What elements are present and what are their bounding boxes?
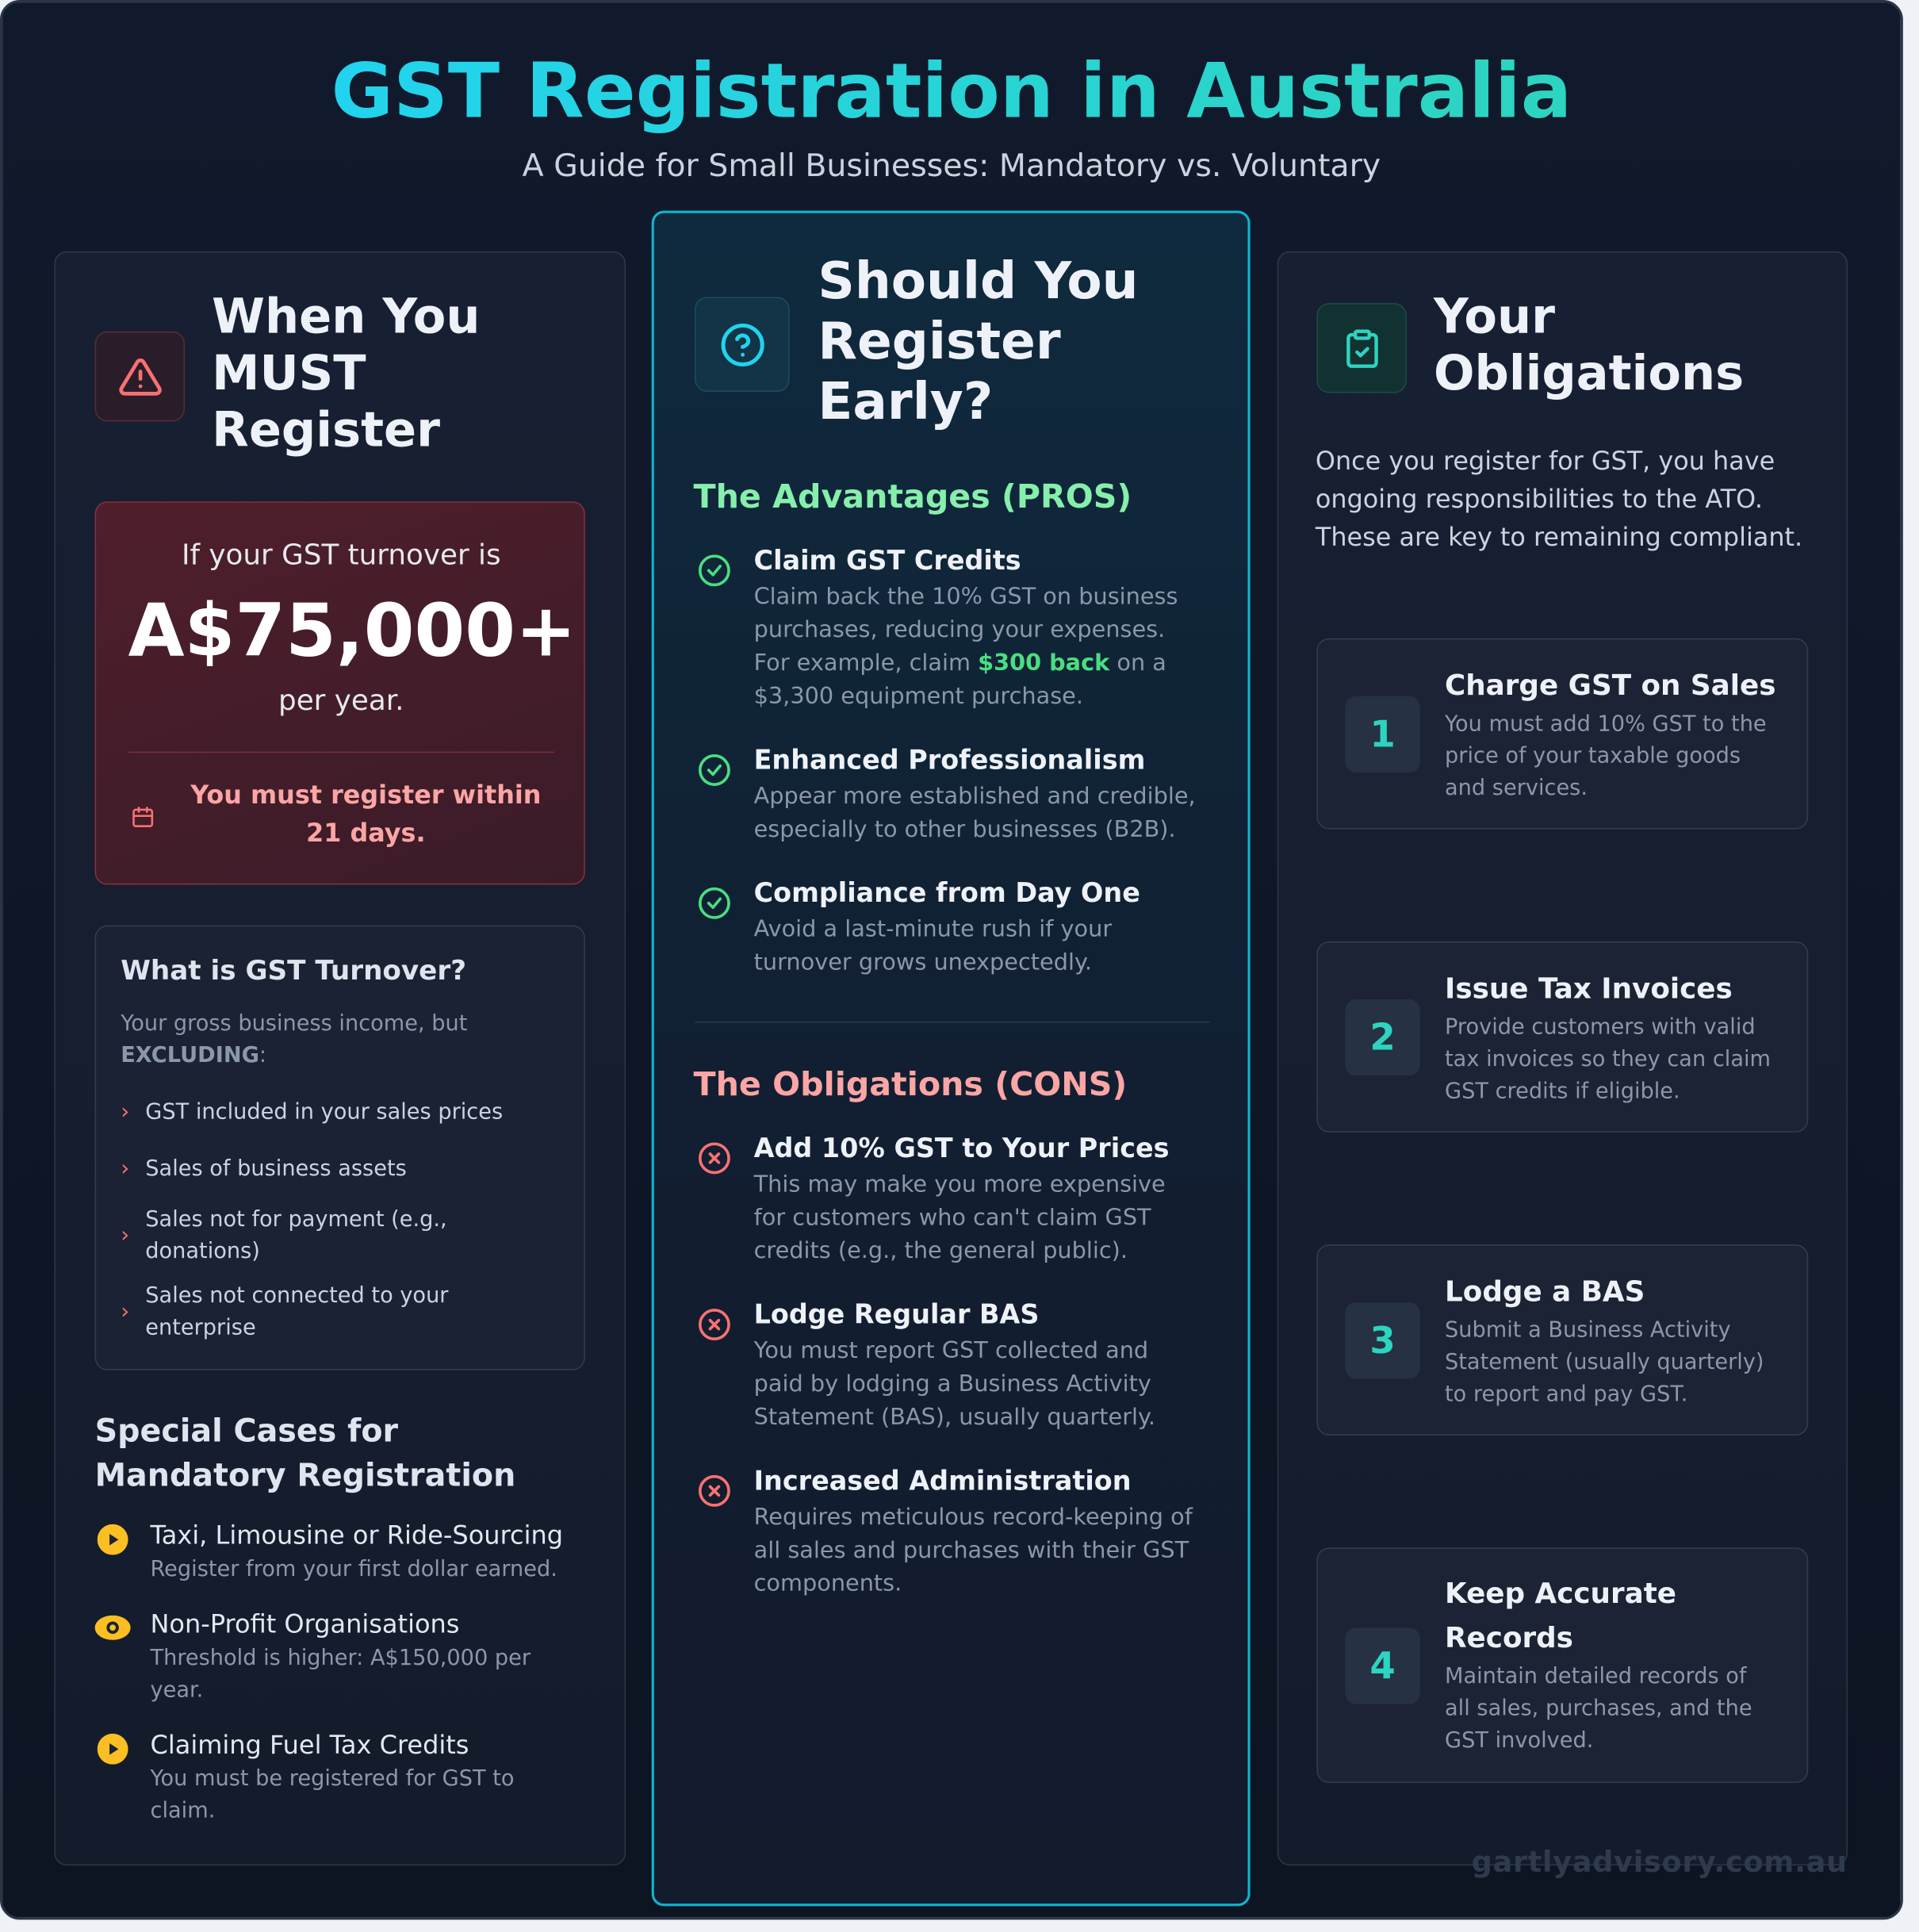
pro 2: Appear more established and credible, especially to other businesses (B2B). xyxy=(754,784,1196,843)
panel: what is gst turnover: › xyxy=(121,1224,129,1248)
card 4: Keep Accurate Records xyxy=(1445,1578,1676,1654)
pro 2 xyxy=(699,746,1196,843)
card 4 xyxy=(1316,1547,1808,1783)
heading xyxy=(212,289,480,458)
panel: what is gst turnover: Your gross business income, but EXCLUDING: xyxy=(121,1012,467,1068)
title: GST Registration in Australia xyxy=(331,47,1572,136)
special cases heading: Mandatory Registration xyxy=(95,1458,515,1495)
special case: taxi: Taxi, Limousine or Ride-Sourcing xyxy=(151,1520,563,1550)
card 1: Charge GST on Sales xyxy=(1445,670,1776,703)
heading xyxy=(1434,289,1744,401)
threshold callout xyxy=(95,501,585,884)
con 1: Add 10% GST to Your Prices xyxy=(754,1133,1170,1164)
panel: your obligations xyxy=(1277,251,1848,1865)
card 3: Lodge a BAS xyxy=(1445,1277,1645,1309)
pro 3 xyxy=(699,879,1140,976)
heading xyxy=(818,250,1139,431)
panel: what is gst turnover: Sales of business assets xyxy=(145,1157,407,1182)
panel: what is gst turnover: › xyxy=(121,1100,129,1125)
pros heading: The Advantages (PROS) xyxy=(694,478,1132,516)
icon: question xyxy=(695,297,790,392)
intro text: Once you register for GST, you have ongoing responsibilities to the ATO. These are key to remaining compliant. xyxy=(1316,446,1802,552)
special case: fuel tax: You must be registered for GST to claim. xyxy=(151,1767,515,1823)
panel: what is gst turnover: Sales not for payment (e.g., donations) xyxy=(145,1208,447,1264)
card 2 xyxy=(1316,941,1808,1133)
card 1: You must add 10% GST to the price of your taxable goods and services. xyxy=(1445,712,1767,801)
special cases heading xyxy=(95,1413,515,1495)
con 2: You must report GST collected and paid by lodging a Business Activity Statement (BAS), usually quarterly. xyxy=(754,1338,1155,1431)
icon: calendar xyxy=(132,807,154,827)
con 3 xyxy=(699,1466,1193,1597)
con 2 xyxy=(699,1300,1155,1431)
con 2: Lodge Regular BAS xyxy=(754,1300,1039,1331)
con 3: Requires meticulous record-keeping of all sales and purchases with their GST components. xyxy=(754,1505,1193,1597)
special case: non-profit xyxy=(95,1609,531,1703)
special case: fuel tax: Claiming Fuel Tax Credits xyxy=(151,1730,469,1760)
heading: MUST xyxy=(212,347,366,401)
panel: when you must register xyxy=(54,251,626,1865)
special case: fuel tax xyxy=(97,1730,515,1823)
panel: should you register early xyxy=(652,211,1251,1906)
pro 1 xyxy=(699,546,1178,710)
threshold callout: per year. xyxy=(278,685,404,717)
icon: warning xyxy=(95,332,185,421)
con 1 xyxy=(699,1133,1170,1264)
card 1 xyxy=(1316,638,1808,830)
card 1: 1 xyxy=(1369,713,1396,756)
pro 1: Claim back the 10% GST on business purchases, reducing your expenses. For example, claim $300 back on a $3,300 equipment purchase. xyxy=(754,584,1178,710)
pro 3: Avoid a last-minute rush if your turnover grows unexpectedly. xyxy=(754,917,1112,976)
pro 2: Enhanced Professionalism xyxy=(754,746,1145,776)
card 2: Issue Tax Invoices xyxy=(1445,973,1733,1006)
card 4: Maintain detailed records of all sales, purchases, and the GST involved. xyxy=(1445,1665,1752,1754)
panel: what is gst turnover: › xyxy=(121,1157,129,1182)
heading: Register xyxy=(212,403,440,458)
special cases heading: Special Cases for xyxy=(95,1413,398,1451)
special case: taxi xyxy=(97,1520,563,1582)
cons heading: The Obligations (CONS) xyxy=(694,1066,1127,1104)
card 3: Submit a Business Activity Statement (usually quarterly) to report and pay GST. xyxy=(1445,1318,1764,1407)
panel: what is gst turnover: › xyxy=(121,1300,129,1324)
big number: A$75,000+ xyxy=(128,588,576,673)
card 2: Provide customers with valid tax invoices so they can claim GST credits if eligible. xyxy=(1445,1015,1771,1104)
heading: Obligations xyxy=(1434,347,1744,401)
special case: taxi: Register from your first dollar earned. xyxy=(151,1558,557,1582)
heading: Early? xyxy=(818,371,993,431)
watermark: gartlyadvisory.com.au xyxy=(1472,1845,1848,1879)
heading: Your xyxy=(1434,289,1555,345)
special case: non-profit: Threshold is higher: A$150,000 per year. xyxy=(151,1646,531,1703)
icon: clipboard xyxy=(1316,303,1407,393)
pro 3: Compliance from Day One xyxy=(754,879,1140,910)
card 2: 2 xyxy=(1369,1016,1396,1059)
card 4: 4 xyxy=(1369,1644,1396,1688)
heading: Should You xyxy=(818,250,1139,311)
panel: what is gst turnover: GST included in your sales prices xyxy=(145,1100,503,1125)
con 1: This may make you more expensive for customers who can't claim GST credits (e.g., the general public). xyxy=(754,1171,1166,1264)
heading: When You xyxy=(212,289,480,345)
con 3: Increased Administration xyxy=(754,1466,1132,1497)
panel: what is gst turnover xyxy=(95,926,585,1370)
card 3 xyxy=(1316,1244,1808,1436)
panel: what is gst turnover: What is GST Turnover? xyxy=(121,956,466,987)
heading: Register xyxy=(818,311,1061,371)
special case: non-profit: Non-Profit Organisations xyxy=(151,1609,459,1639)
threshold callout: If your GST turnover is xyxy=(182,539,501,572)
card 3: 3 xyxy=(1369,1319,1396,1363)
threshold callout: You must register within 21 days. xyxy=(190,780,541,848)
pro 1: Claim GST Credits xyxy=(754,546,1021,577)
subtitle: A Guide for Small Businesses: Mandatory vs. Voluntary xyxy=(523,147,1381,183)
panel: what is gst turnover: Sales not connected to your enterprise xyxy=(145,1284,448,1340)
